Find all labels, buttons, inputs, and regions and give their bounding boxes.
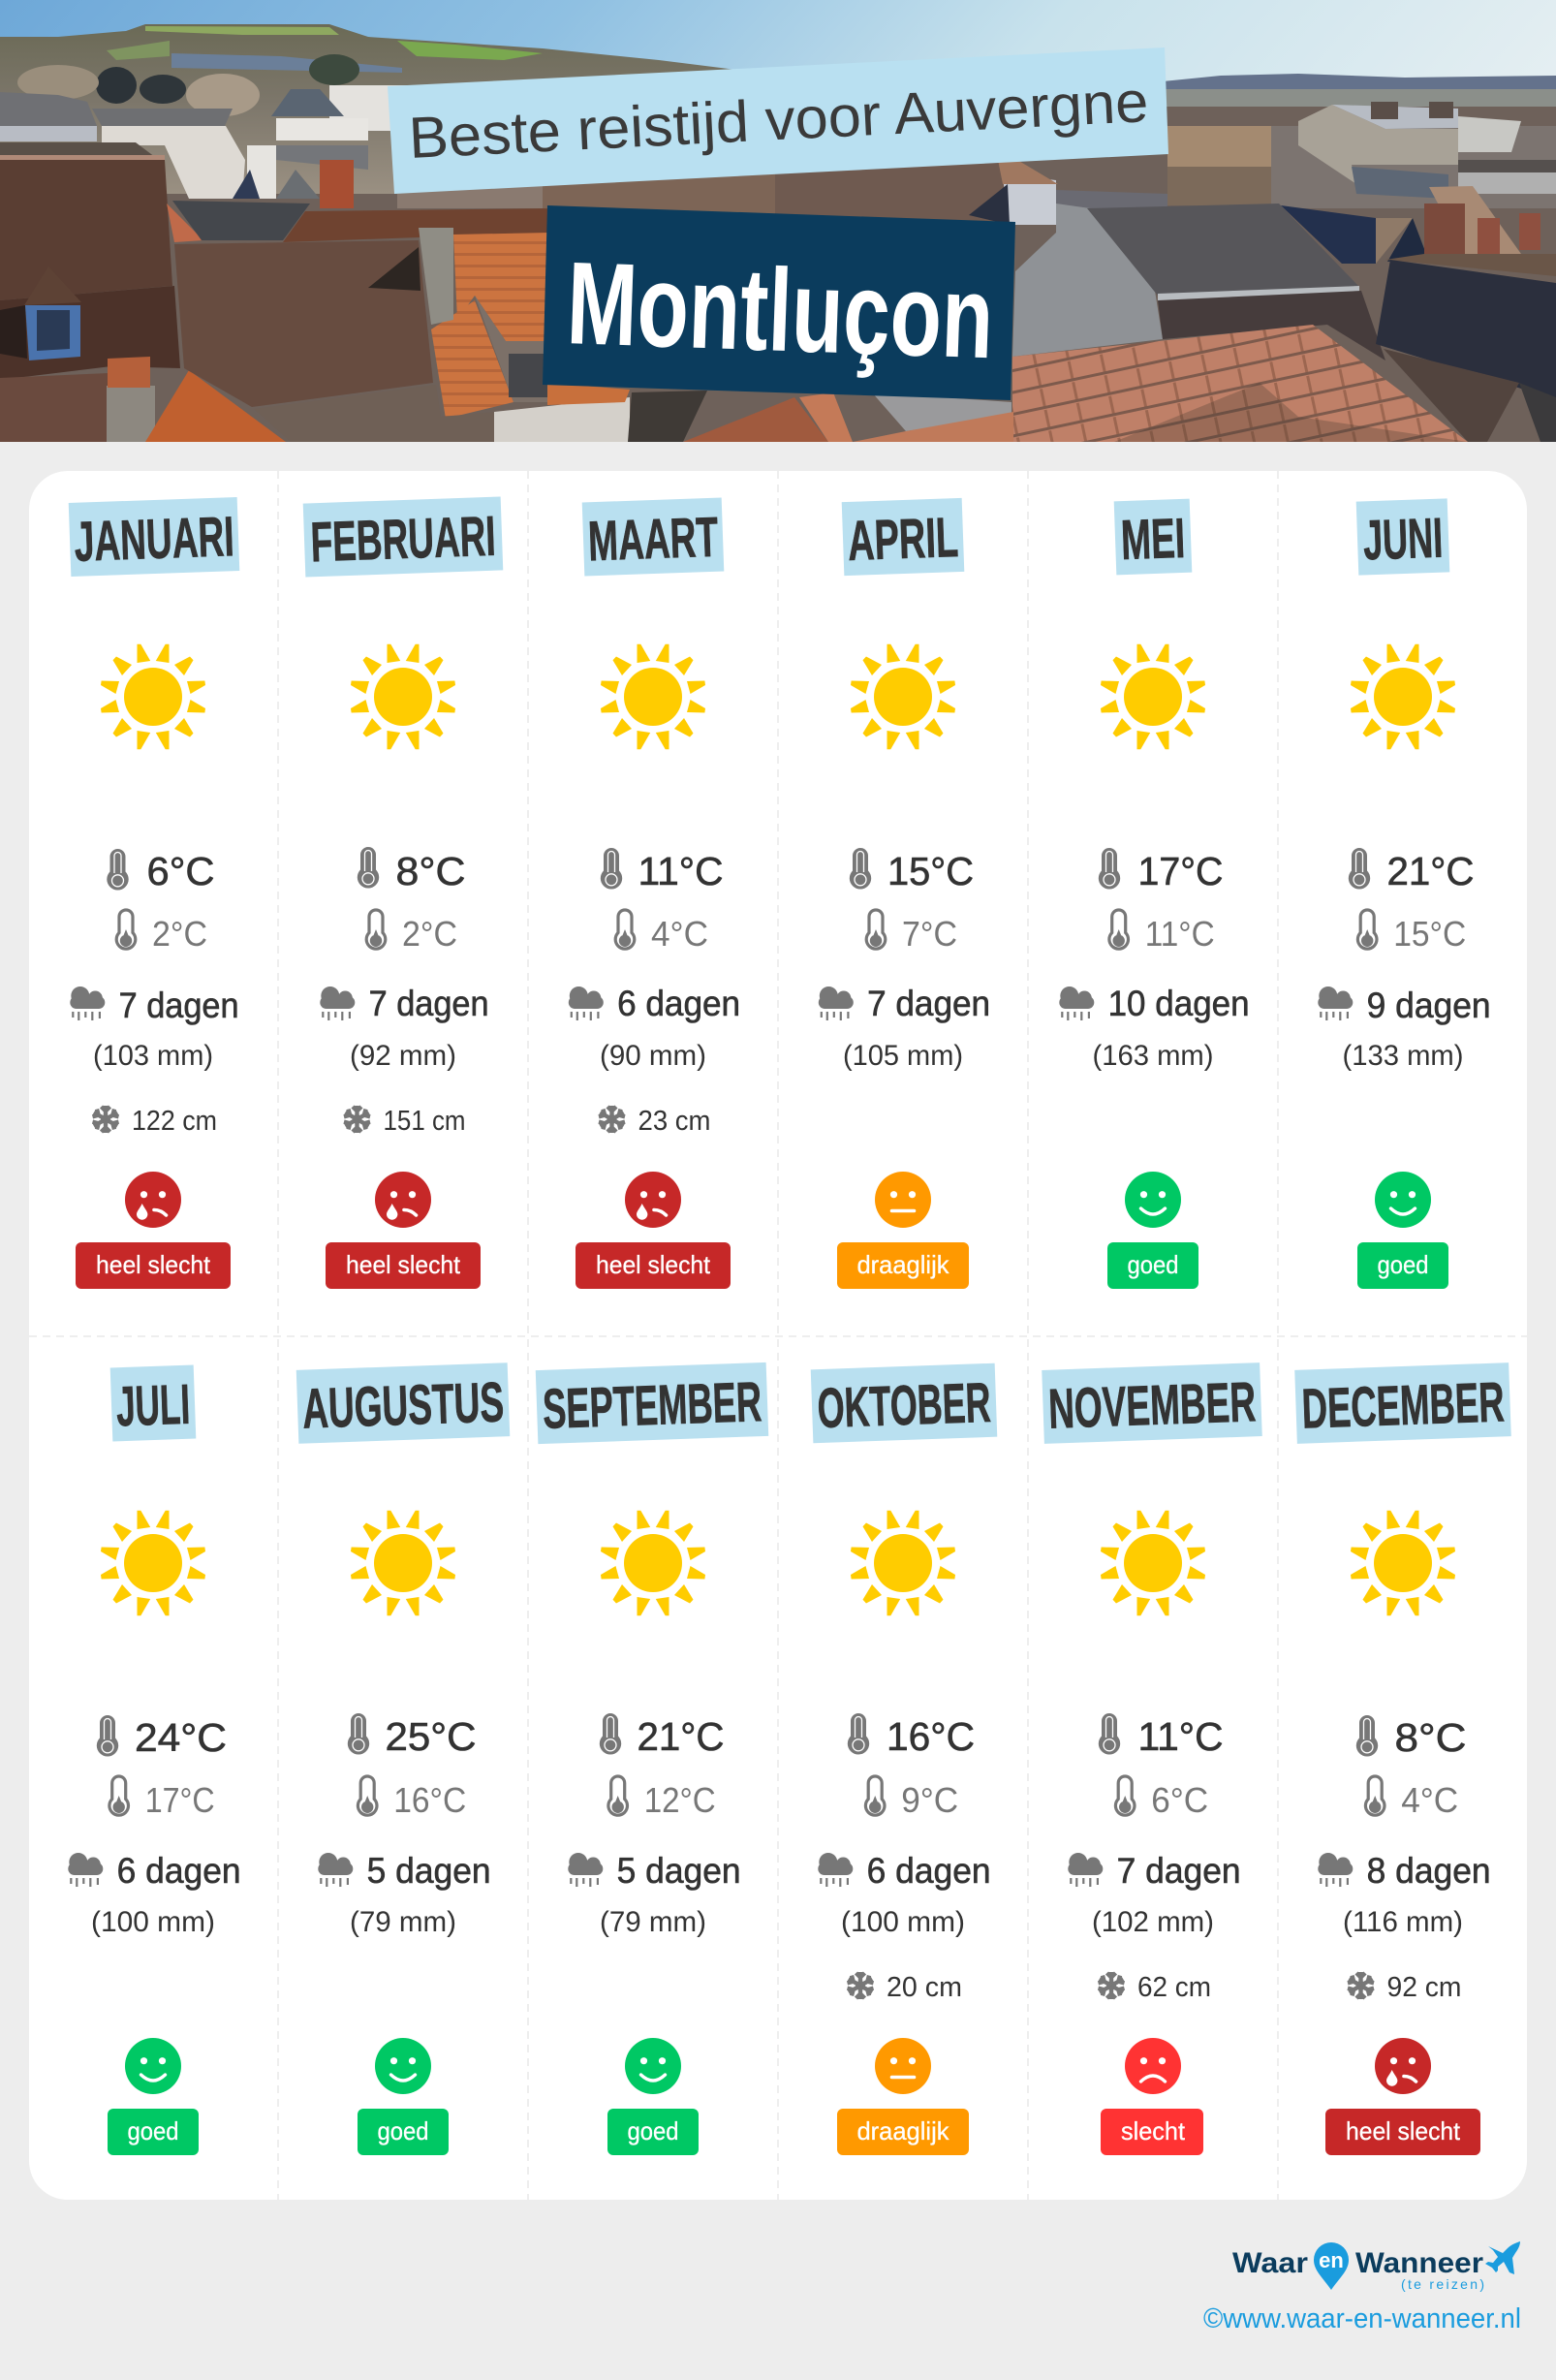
heading: juni [1356,498,1449,576]
min temperature [866,910,957,954]
panel: februari [303,496,503,1289]
rating badge [837,2109,969,2155]
rainfall: (133 mm) [1343,1040,1463,1072]
rating badge: slecht [1121,2116,1186,2145]
rain days [818,1851,991,1891]
rating badge: goed [628,2116,678,2145]
smiley: draaglijk [875,2038,931,2094]
snow [1098,1972,1211,2003]
photo: rooftops of Montluçon [0,0,1556,442]
snow: 23 cm [638,1106,711,1137]
rainfall: (103 mm) [93,1040,213,1072]
smiley: slecht [1125,2038,1181,2094]
min temperature [366,910,457,954]
min temperature: 16°C [393,1780,466,1820]
rating badge [837,1242,969,1289]
smiley: goed [1375,1172,1431,1228]
snow [343,1106,465,1137]
snow [598,1106,711,1137]
heading: februari: FEBRUARI [310,505,497,574]
heading: april: APRIL [847,506,959,573]
snow [92,1106,217,1137]
rating badge: goed [1378,1250,1428,1279]
icon: sun [601,1511,705,1615]
rating badge: goed [1128,1250,1178,1279]
heading: februari [303,496,503,578]
max temperature: 21°C [638,1714,725,1759]
rating badge: heel slecht [596,1250,711,1279]
logo: Waar en Wanneer: Wanneer [1355,2247,1483,2279]
snow: 92 cm [1387,1972,1461,2003]
rain days [1318,986,1491,1025]
smiley: goed [375,2038,431,2094]
rating badge: heel slecht [1346,2116,1461,2145]
rain days: 7 dagen [119,986,239,1025]
max temperature: 17°C [1137,849,1223,893]
logo: Waar en Wanneer: en [1319,2248,1344,2272]
heading: juli: JULI [115,1373,191,1438]
rain days [819,984,990,1023]
max temperature: 24°C [135,1715,227,1760]
icon: map pin [1314,2242,1349,2290]
city banner: Montluçon: Montluçon [565,236,996,383]
min temperature: 17°C [145,1780,215,1820]
smiley: heel slecht [125,1172,181,1228]
smiley: heel slecht [375,1172,431,1228]
rainfall: (90 mm) [600,1040,706,1072]
card: climate table [29,471,1527,2200]
snow [1347,1972,1461,2003]
logo: Waar en Wanneer: Waar [1232,2247,1308,2279]
title banner: Beste reistijd voor Auvergne [388,47,1168,194]
icon: sun [1101,644,1205,749]
rating badge [108,2109,199,2155]
heading: januari: JANUARI [74,505,235,574]
rain days: 9 dagen [1367,986,1491,1025]
title banner: Beste reistijd voor Auvergne: Beste reistijd voor Auvergne [407,69,1150,171]
icon: plane [1485,2241,1520,2274]
icon: sun [1351,1511,1455,1615]
max temperature [600,1713,725,1759]
max temperature [601,848,723,893]
min temperature [116,910,207,954]
rating badge: draaglijk [856,2116,949,2145]
panel: juni [1318,498,1491,1289]
max temperature [97,1715,227,1760]
heading: mei: MEI [1120,507,1186,572]
heading: oktober: OKTOBER [817,1371,992,1440]
snow: 20 cm [887,1972,962,2003]
heading: juli [110,1365,196,1441]
min temperature [1109,910,1215,954]
snow: 122 cm [132,1106,217,1137]
heading: januari [69,497,239,577]
heading: augustus: AUGUSTUS [301,1370,505,1441]
smiley: draaglijk [875,1172,931,1228]
rating badge [607,2109,699,2155]
max temperature: 11°C [1137,1714,1223,1759]
min temperature: 6°C [1151,1780,1208,1820]
rain days: 7 dagen [369,984,489,1023]
max temperature [107,849,215,893]
heading: oktober [811,1363,997,1443]
min temperature [358,1776,466,1820]
rain days: 7 dagen [1117,1851,1241,1891]
smiley: goed [1125,1172,1181,1228]
icon: sun [351,1511,455,1615]
max temperature: 6°C [147,849,215,893]
icon: sun [1101,1511,1205,1615]
snow: 151 cm [384,1106,465,1137]
rating badge [1101,2109,1203,2155]
max temperature: 8°C [395,849,465,893]
rating badge: goed [128,2116,178,2145]
rating badge: draaglijk [856,1250,949,1279]
panel: oktober [811,1363,997,2155]
smiley: heel slecht [625,1172,681,1228]
smiley: goed [125,2038,181,2094]
panel: januari [69,497,239,1289]
rain days [320,984,489,1023]
max temperature [348,1713,477,1759]
max temperature [1099,1713,1223,1759]
city banner: Montluçon [543,205,1015,400]
icon: sun [851,1511,955,1615]
rain days: 5 dagen [367,1851,491,1891]
rain days [568,1851,741,1891]
min temperature: 4°C [1401,1780,1458,1820]
rain days: 6 dagen [117,1851,241,1891]
min temperature: 12°C [644,1780,716,1820]
rating badge [76,1242,231,1289]
heading: november [1042,1362,1262,1444]
panel: juli [68,1365,241,2155]
smiley: heel slecht [1375,2038,1431,2094]
max temperature: 8°C [1395,1715,1467,1760]
heading: september [536,1362,768,1444]
website url: ©www.waar-en-wanneer.nl [1203,2303,1521,2334]
panel: september [536,1362,768,2155]
rating badge [326,1242,481,1289]
rain days [1318,1851,1491,1891]
rating badge [358,2109,449,2155]
min temperature: 4°C [651,914,708,954]
max temperature [1099,848,1223,893]
rain days: 8 dagen [1367,1851,1491,1891]
min temperature [1357,910,1466,954]
rain days: 5 dagen [617,1851,741,1891]
rain days [68,1851,241,1891]
rating badge [1107,1242,1198,1289]
snow [847,1972,962,2003]
rain days [318,1851,491,1891]
rainfall: (100 mm) [841,1906,965,1938]
max temperature [850,848,974,893]
panel: augustus [296,1362,510,2155]
rainfall: (163 mm) [1093,1040,1213,1072]
rating badge [1325,2109,1480,2155]
max temperature: 16°C [887,1714,975,1759]
icon: sun [101,644,205,749]
rating badge: goed [378,2116,428,2145]
heading: juni: JUNI [1362,507,1444,572]
icon: sun [101,1511,205,1615]
min temperature [1115,1776,1208,1820]
min temperature [608,1776,716,1820]
heading: september: SEPTEMBER [542,1370,762,1441]
rating badge [1357,1242,1448,1289]
panel: november [1042,1362,1262,2155]
rain days [1068,1851,1241,1891]
heading: maart: MAART [587,506,719,573]
max temperature: 11°C [638,849,723,893]
rain days: 10 dagen [1108,984,1250,1023]
max temperature [1349,848,1475,893]
rain days [569,984,740,1023]
min temperature: 2°C [402,914,457,954]
panel: december [1294,1362,1511,2155]
min temperature: 15°C [1393,914,1466,954]
max temperature: 25°C [386,1714,477,1759]
heading: november: NOVEMBER [1047,1370,1257,1441]
min temperature [1365,1776,1458,1820]
rain days [70,986,239,1025]
rating badge: heel slecht [96,1250,211,1279]
min temperature: 7°C [902,914,957,954]
rainfall: (116 mm) [1343,1906,1463,1938]
rainfall: (100 mm) [91,1906,215,1938]
min temperature [615,910,708,954]
rainfall: (92 mm) [350,1040,456,1072]
min temperature: 9°C [901,1780,958,1820]
icon: sun [351,644,455,749]
min temperature: 2°C [152,914,207,954]
heading: mei [1114,499,1192,575]
min temperature [109,1776,215,1820]
snow: 62 cm [1137,1972,1211,2003]
rainfall: (79 mm) [600,1906,706,1938]
icon: sun [1351,644,1455,749]
rainfall: (105 mm) [843,1040,963,1072]
panel: april [819,498,990,1289]
heading: augustus [296,1362,510,1444]
heading: maart [582,498,724,576]
max temperature: 15°C [887,849,974,893]
panel: maart [569,498,740,1289]
min temperature: 11°C [1145,914,1215,954]
rain days: 7 dagen [867,984,990,1023]
logo: Waar en Wanneer [1232,2241,1520,2292]
max temperature [358,847,465,893]
min temperature [865,1776,958,1820]
rain days: 6 dagen [617,984,740,1023]
rating badge [576,1242,731,1289]
logo: Waar en Wanneer: (te reizen) [1401,2276,1484,2292]
smiley: goed [625,2038,681,2094]
rain days: 6 dagen [867,1851,991,1891]
max temperature: 21°C [1387,849,1475,893]
max temperature [848,1713,975,1759]
icon: sun [601,644,705,749]
heading: april [842,498,964,576]
rating badge: heel slecht [346,1250,461,1279]
panel: mei [1059,499,1250,1289]
max temperature [1356,1715,1467,1760]
rainfall: (102 mm) [1092,1906,1214,1938]
icon: sun [851,644,955,749]
rainfall: (79 mm) [350,1906,456,1938]
